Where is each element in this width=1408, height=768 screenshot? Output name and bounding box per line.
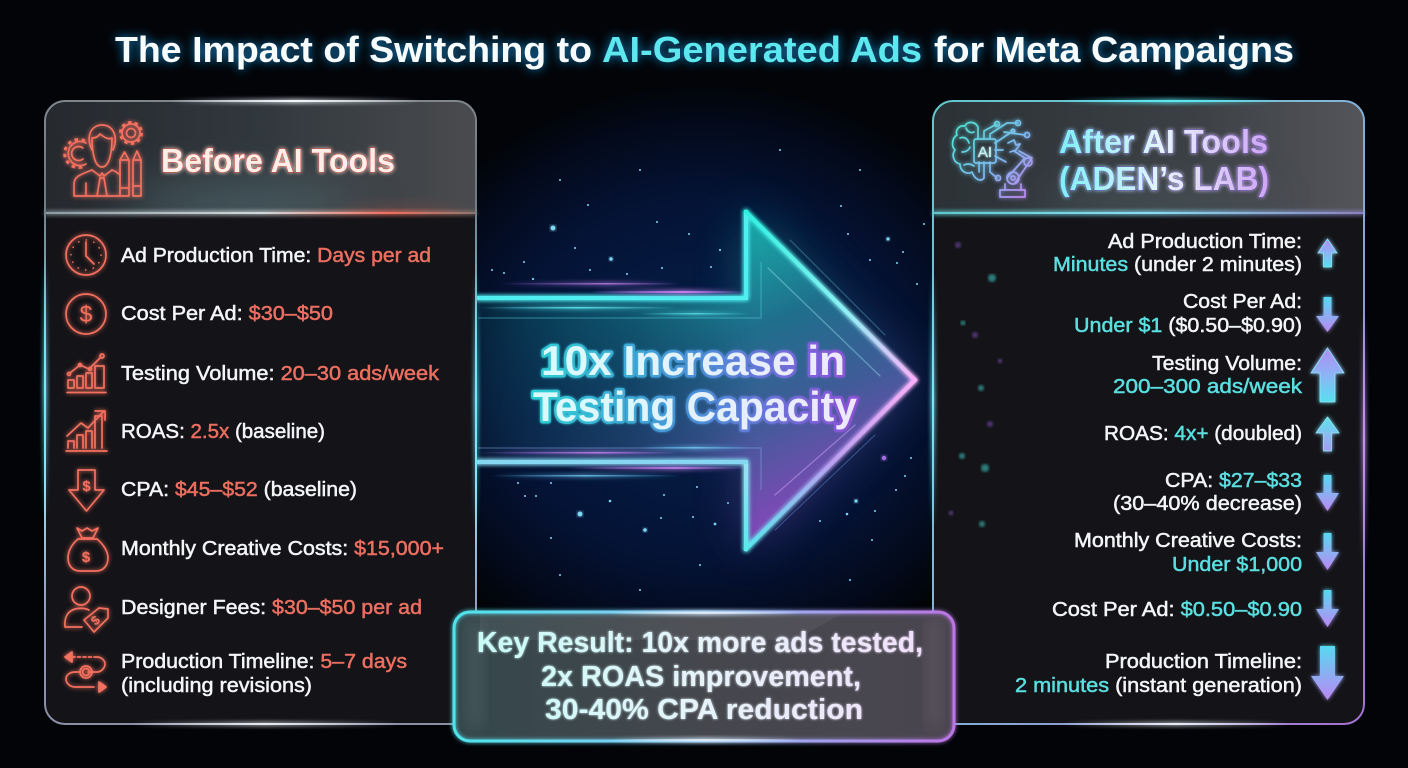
row: monthly creative costs [68,528,444,571]
star field [491,149,925,591]
heading: after AI tools: After AI Tools [1059,123,1268,160]
row: ad production time [66,235,431,275]
icon label: AI: AI [978,144,992,161]
panel: after AI tools [932,100,1365,725]
row: CPA: CPA: $27–$33 [1165,470,1302,492]
callout text: 30-40% CPA reduction [545,694,863,726]
icon: growth chart [66,411,107,451]
row: ad production time: Ad Production Time: Days per ad [121,245,431,267]
row: production timeline [65,651,407,697]
row: monthly creative costs [1074,530,1302,576]
row: monthly creative costs: Under $1,000 [1172,554,1302,576]
row: ad production time: Ad Production Time: [1108,231,1302,253]
icon: bar chart with line [67,354,106,392]
row: CPA: (30–40% decrease) [1113,493,1302,515]
panel header band [46,102,475,212]
heading: before AI tools: Before AI Tools [161,142,395,179]
heading: after AI tools: (ADEN’s LAB) [1059,160,1269,197]
panel body [45,101,476,724]
row: cost per ad: Under $1 ($0.50–$0.90) [1074,315,1302,337]
icon: arrow down [1316,297,1339,332]
arrow glow [746,212,915,549]
heading: after AI tools [1059,123,1269,197]
icon: looped timeline arrows [65,652,106,692]
row: cost per ad [1074,291,1302,337]
callout text: Key Result: 10x more ads tested, [477,627,923,659]
row: cost per ad: Cost Per Ad: $30–$50 [121,303,333,325]
row: designer fees [65,587,422,632]
title: The Impact of Switching to [115,29,592,70]
row: CPA: CPA: $45–$52 (baseline) [121,479,357,501]
icon: person with price tag [65,587,108,632]
icon: dollar coin [66,294,106,334]
icon: arrow up [1316,417,1339,451]
row: testing volume: Testing Volume: 20–30 ads/week [121,363,440,385]
title: AI-Generated Ads [602,29,922,70]
icon: person with gears and pencils [65,122,142,196]
icon: arrow down [1316,590,1339,627]
row: ROAS: ROAS: 2.5x (baseline) [121,421,325,443]
row: designer fees: Designer Fees: $30–$50 per ad [121,597,422,619]
diagonal glints [768,240,885,530]
row: ad production time: Minutes (under 2 minutes) [1053,254,1302,276]
arrow inner lines [478,262,761,490]
icon: money bag [68,528,108,571]
light streaks [478,283,750,476]
row: testing volume: 200–300 ads/week [1113,376,1303,398]
icon: money bag: $ [82,549,91,566]
arrow body [478,212,915,549]
icon: person with price tag: $ [88,612,104,628]
icon: large arrow down [1311,646,1344,700]
callout: key result [454,612,954,741]
arrow: 10x increase [478,212,915,549]
callout text [477,627,923,726]
row: production timeline [1015,651,1302,697]
arrow outline [478,212,915,549]
row: ROAS: ROAS: 4x+ (doubled) [1104,423,1302,445]
row: ROAS [66,411,325,451]
row: cost per ad: Cost Per Ad: $0.50–$0.90 [1052,599,1302,621]
row: production timeline: Production Timeline: [1105,651,1302,673]
icon: arrow up [1318,239,1337,267]
icon: large arrow up [1311,348,1344,402]
callout text: 2x ROAS improvement, [541,661,861,693]
row: monthly creative costs: Monthly Creative Costs: [1074,530,1302,552]
panel: before AI tools [44,100,477,725]
row: production timeline: (including revisions) [121,675,312,697]
icon: arrow down [1316,533,1339,570]
row: cost per ad: Cost Per Ad: [1183,291,1302,313]
row: CPA [69,470,357,511]
title [115,29,1294,70]
icon: AI brain and robot arm [953,120,1032,197]
row: ad production time [1053,231,1302,276]
icon: down arrow with dollar: $ [82,478,91,495]
row: production timeline: Production Timeline: 5–7 days [121,651,407,673]
row: testing volume [67,354,440,392]
panel header band [934,102,1363,212]
arrow text [533,337,858,430]
panel body [933,101,1364,724]
arrow text: 10x Increase in [541,337,845,384]
icon: down arrow with dollar [69,470,104,511]
row: CPA [1113,470,1302,515]
callout border [454,612,954,741]
row: monthly creative costs: Monthly Creative Costs: $15,000+ [121,538,444,560]
row: production timeline: 2 minutes (instant generation) [1015,675,1302,697]
title: for Meta Campaigns [934,29,1294,70]
icon: clock [66,235,106,275]
row: cost per ad [66,294,333,334]
icon: arrow down [1316,475,1339,511]
arrow text: Testing Capacity [533,383,858,430]
row: testing volume [1113,353,1303,398]
row: testing volume: Testing Volume: [1152,353,1302,375]
icon: dollar coin: $ [80,301,93,327]
